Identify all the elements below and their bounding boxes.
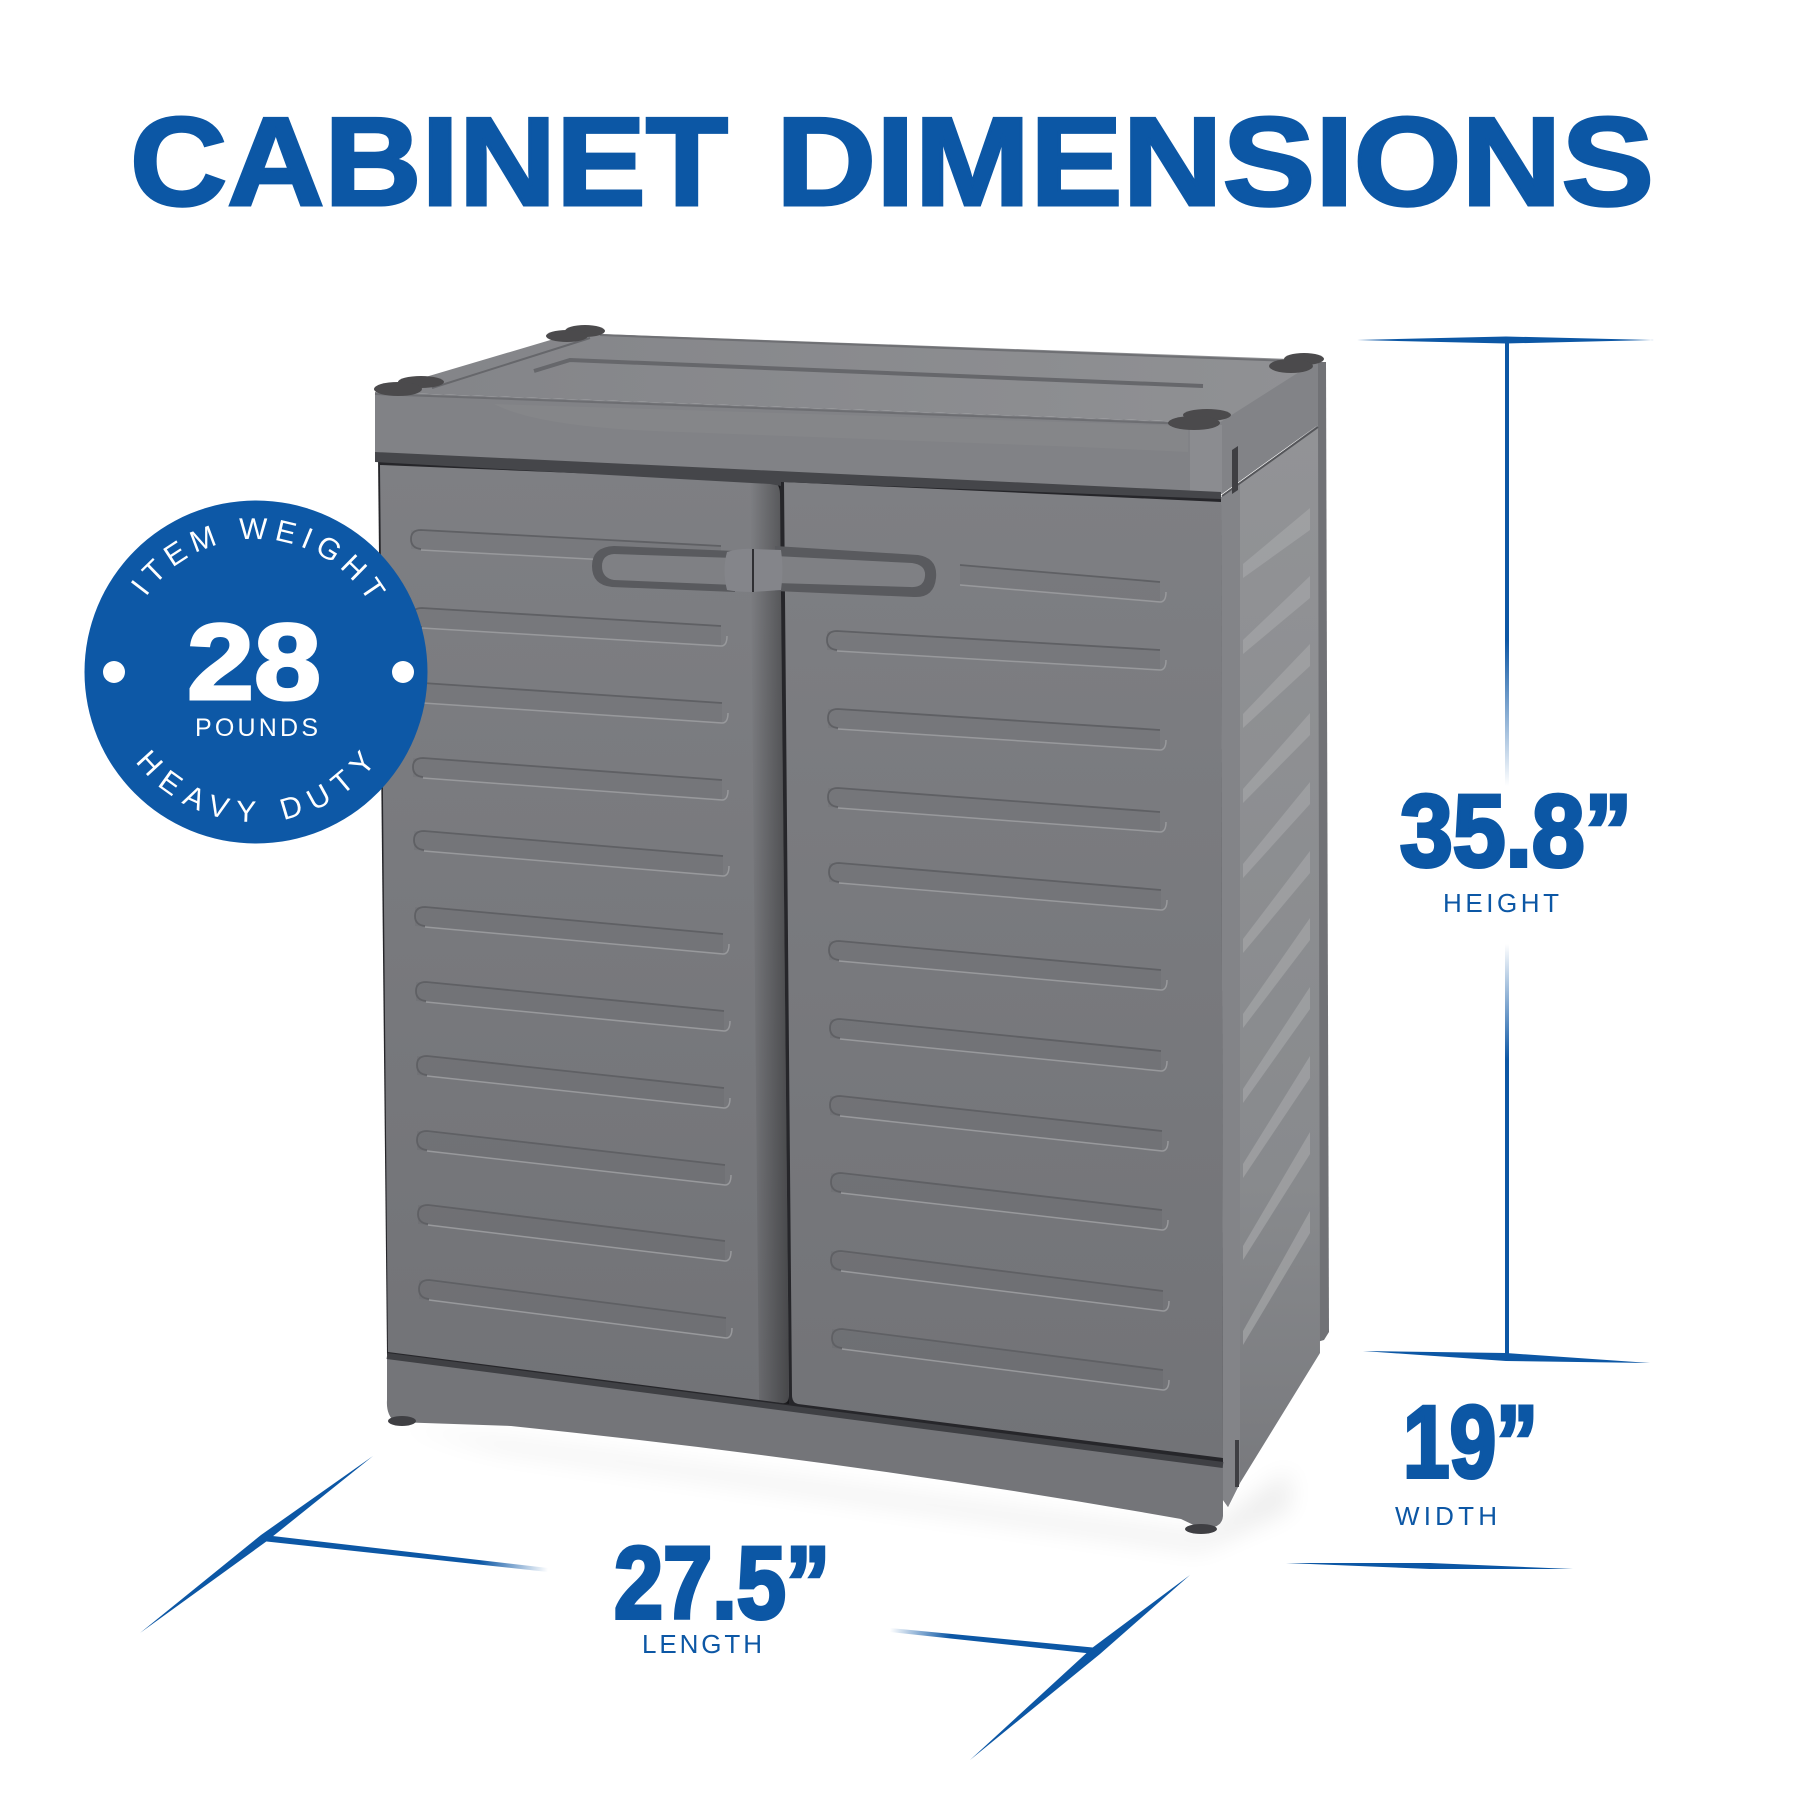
height upper line bbox=[1505, 340, 1509, 786]
height label: HEIGHT bbox=[1443, 888, 1559, 918]
lid side seam bbox=[1222, 427, 1318, 496]
side base slot bbox=[1235, 1440, 1239, 1487]
corner caps bbox=[374, 325, 1324, 430]
right door ribs bbox=[827, 565, 1169, 1390]
floor shadow bbox=[395, 1425, 1290, 1550]
title word two: DIMENSIONS bbox=[776, 91, 1654, 232]
left rib fills bbox=[411, 530, 726, 1337]
height top bar bbox=[1357, 336, 1654, 344]
right handle grip bbox=[775, 556, 925, 587]
cabinet illustration bbox=[374, 325, 1329, 1550]
width dimension bbox=[1286, 1385, 1573, 1569]
left handle ring bbox=[592, 546, 735, 592]
right handle bbox=[775, 546, 936, 597]
length label: LENGTH bbox=[642, 1629, 762, 1659]
left handle bbox=[592, 546, 735, 592]
height bottom bar bbox=[1363, 1351, 1650, 1363]
right rib highlights bbox=[837, 585, 1169, 1390]
badge circle bbox=[84, 500, 428, 844]
width bar bbox=[1286, 1563, 1573, 1569]
length dimension bbox=[140, 1456, 1190, 1760]
lid edge line bbox=[375, 394, 1219, 425]
length value: 27.5” bbox=[614, 1526, 830, 1640]
handle split bbox=[752, 549, 754, 592]
lid side bbox=[1219, 360, 1318, 494]
lid front bbox=[375, 392, 1222, 494]
base seam bbox=[387, 1356, 1223, 1465]
weight unit: POUNDS bbox=[195, 714, 318, 742]
lid top bbox=[375, 333, 1318, 423]
left foot bbox=[388, 1416, 416, 1426]
left door bevel bbox=[750, 480, 789, 1404]
side rear post bbox=[1316, 362, 1329, 1342]
title bbox=[130, 91, 1654, 232]
length left bar bbox=[140, 1456, 373, 1633]
right dot bbox=[392, 661, 414, 683]
weight number: 28 bbox=[187, 601, 321, 722]
title word one: CABINET bbox=[130, 91, 728, 232]
side front edge bbox=[1221, 484, 1240, 1507]
lid side slot bbox=[1232, 446, 1238, 494]
left rib shadows bbox=[411, 530, 726, 1318]
width label: WIDTH bbox=[1395, 1501, 1497, 1531]
side panel bbox=[1221, 425, 1320, 1507]
weight badge bbox=[84, 500, 428, 844]
width value: 19” bbox=[1403, 1385, 1538, 1499]
length left line bbox=[262, 1535, 548, 1572]
right rib shadows bbox=[827, 565, 1163, 1370]
lid back rim bbox=[600, 335, 1290, 361]
badge bottom text: HEAVY DUTY bbox=[136, 750, 371, 822]
right handle ring bbox=[775, 546, 936, 597]
left dot bbox=[103, 661, 125, 683]
length right bar bbox=[970, 1575, 1190, 1760]
handle hinge bbox=[724, 549, 782, 592]
height value: 35.8” bbox=[1400, 774, 1632, 888]
height dimension bbox=[1357, 336, 1654, 1363]
top seam bbox=[375, 452, 1221, 499]
right rib fills bbox=[827, 565, 1163, 1389]
right door bbox=[784, 482, 1223, 1458]
left handle grip bbox=[602, 554, 735, 585]
left door ribs bbox=[411, 530, 732, 1338]
lid recess bbox=[534, 360, 1203, 386]
left rib highlights bbox=[421, 550, 732, 1338]
length right line bbox=[890, 1628, 1098, 1654]
front foot bbox=[1185, 1524, 1217, 1534]
lid front recess bbox=[494, 404, 1188, 452]
base bbox=[387, 1355, 1223, 1528]
lid rim bbox=[432, 338, 590, 388]
height lower line bbox=[1505, 944, 1509, 1356]
side ribs bbox=[1243, 508, 1310, 1345]
left door bbox=[380, 465, 789, 1403]
body backing bbox=[378, 456, 1223, 1464]
corner post bbox=[1190, 425, 1222, 493]
badge top text: ITEM WEIGHT bbox=[131, 518, 386, 596]
